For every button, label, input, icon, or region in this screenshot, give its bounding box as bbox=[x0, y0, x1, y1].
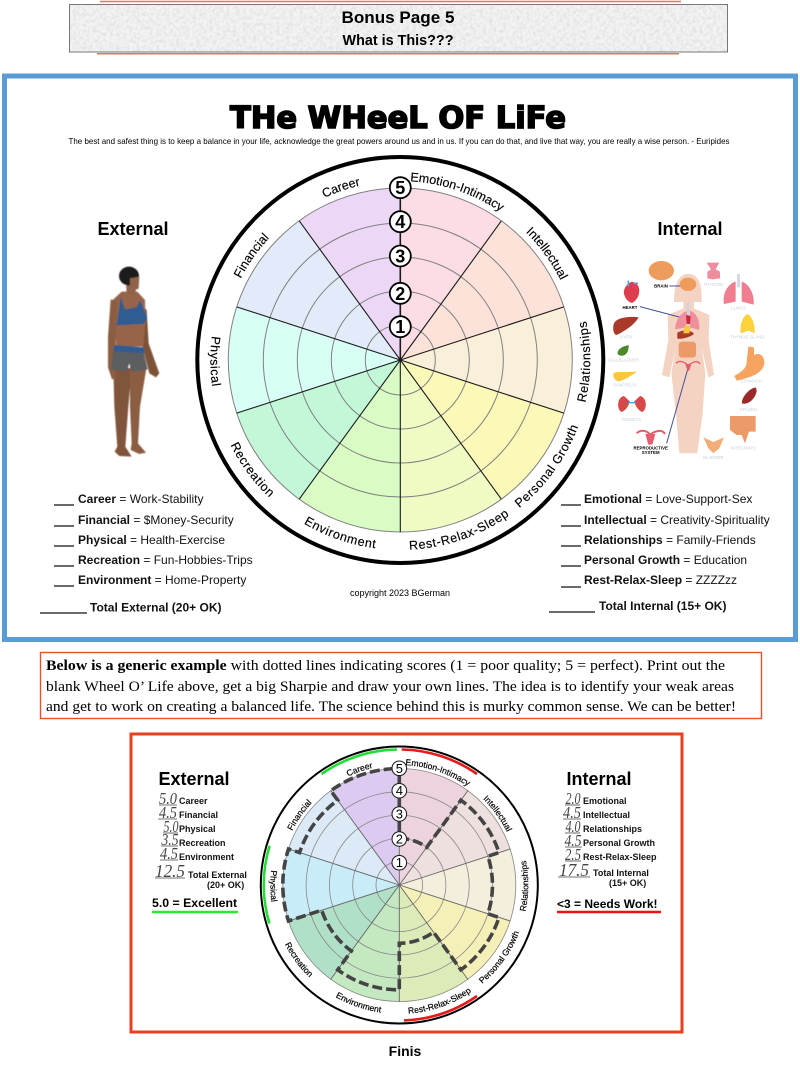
organ: gallbladder bbox=[618, 345, 629, 356]
internal scores: (15+ OK) bbox=[609, 878, 646, 888]
legend: needs work: <3 = Needs Work! bbox=[557, 897, 658, 911]
example score markers bbox=[392, 761, 407, 870]
example wheel labels: Rest-Relax-Sleep bbox=[408, 988, 471, 1014]
wheel labels: Environment bbox=[304, 516, 376, 548]
score outline bbox=[283, 768, 499, 990]
example wheel labels: Intellectual bbox=[483, 795, 512, 832]
internal scores: Total Internal bbox=[593, 868, 649, 878]
header subtitle: What is This??? bbox=[342, 33, 454, 49]
organ: bladder bbox=[703, 437, 724, 453]
external checklist: Physical = Health-Exercise bbox=[78, 533, 225, 547]
organ: brain bbox=[649, 261, 696, 291]
wheel chart bbox=[195, 155, 606, 565]
copyright: copyright 2023 BGerman bbox=[350, 588, 450, 598]
example wheel chart bbox=[260, 746, 539, 1024]
external scores: (20+ OK) bbox=[207, 880, 244, 890]
external checklist: Recreation = Fun-Hobbies-Trips bbox=[78, 553, 253, 567]
organ captions: PANCREAS bbox=[613, 383, 637, 388]
organ: thyroid bbox=[707, 263, 720, 279]
organ captions: THYMUS GLAND bbox=[730, 334, 765, 339]
internal checklist: Rest-Relax-Sleep = ZZZZzz bbox=[584, 573, 737, 587]
internal scores: 2.5 bbox=[565, 845, 581, 864]
closing word: Finis bbox=[389, 1043, 422, 1059]
heading: internal: Internal bbox=[657, 219, 723, 239]
wheel labels: Financial bbox=[234, 232, 269, 278]
near arm bbox=[108, 299, 117, 379]
waistband bbox=[113, 345, 144, 354]
example score markers: 1 bbox=[396, 855, 403, 870]
external scores: 5.0 bbox=[159, 789, 177, 808]
example wheel labels: Emotion-Intimacy bbox=[406, 759, 470, 786]
organ captions: LIVER bbox=[620, 335, 632, 340]
wheel labels: Intellectual bbox=[526, 226, 568, 280]
wheel labels: Physical bbox=[208, 336, 222, 386]
far arm bbox=[142, 305, 159, 377]
score markers: 1 bbox=[395, 317, 405, 337]
bra bbox=[117, 297, 147, 325]
wheel labels: Rest-Relax-Sleep bbox=[410, 511, 508, 550]
internal scores: Intellectual bbox=[583, 810, 630, 820]
heading: external: External bbox=[97, 219, 169, 239]
organ: spleen bbox=[742, 387, 757, 404]
callout: explanation text bbox=[40, 652, 762, 718]
external scores: Recreation bbox=[179, 838, 226, 848]
heading: external example: External bbox=[158, 769, 230, 789]
internal checklist: Total Internal (15+ OK) bbox=[599, 599, 726, 613]
external scores: Career bbox=[179, 796, 208, 806]
organ captions: LUNGS bbox=[731, 305, 746, 310]
external checklist: Total External (20+ OK) bbox=[90, 600, 221, 614]
internal scores: 4.5 bbox=[563, 803, 581, 822]
external scores bbox=[155, 789, 247, 890]
header banner bbox=[70, 2, 728, 54]
wheel labels: Personal Growth bbox=[514, 426, 578, 508]
organ: reproductive system bbox=[637, 369, 688, 445]
external scores: 3.5 bbox=[161, 830, 178, 849]
callout: explanation text: and get to work on creating a balanced life. The science behind this is murky common sense. We can be better! bbox=[46, 699, 736, 715]
internal checklist: Personal Growth = Education bbox=[584, 553, 747, 567]
internal scores: Personal Growth bbox=[583, 838, 655, 848]
callout: explanation text: Below is a generic example with dotted lines indicating scores (1 = poor quality; 5 = perfect). Print out the bbox=[46, 658, 725, 674]
organ: heart bbox=[624, 281, 687, 319]
near leg bbox=[113, 367, 132, 457]
internal scores: 17.5 bbox=[559, 860, 589, 880]
external scores: Total External bbox=[188, 870, 247, 880]
callout: explanation text: blank Wheel O’ Life above, get a big Sharpie and draw your own lines. The idea is to identify your weak areas bbox=[46, 679, 734, 695]
score markers: 2 bbox=[395, 284, 405, 304]
organ captions: GALLBLADDER bbox=[608, 358, 639, 363]
example wheel labels bbox=[268, 759, 530, 1014]
external checklist: Career = Work-Stability bbox=[78, 492, 204, 506]
organ captions: HEART bbox=[623, 305, 638, 310]
organ: thymus gland bbox=[740, 314, 755, 333]
highlight arcs bbox=[264, 750, 477, 1020]
example score markers: 3 bbox=[396, 806, 403, 822]
internal scores: 4.0 bbox=[566, 817, 581, 836]
internal organs in body bbox=[675, 303, 700, 371]
example wheel labels: Personal Growth bbox=[478, 931, 520, 984]
example wheel labels: Physical bbox=[268, 870, 278, 902]
organ captions: SYSTEM bbox=[642, 450, 660, 455]
internal scores bbox=[558, 789, 657, 888]
external scores: 4.5 bbox=[160, 844, 178, 863]
neck and face bbox=[126, 282, 137, 295]
wheel labels: Recreation bbox=[230, 442, 273, 498]
example wheel labels: Environment bbox=[336, 992, 382, 1013]
wheel labels: Emotion-Intimacy bbox=[411, 172, 504, 212]
example score markers: 2 bbox=[396, 832, 403, 846]
legend: excellent: 5.0 = Excellent bbox=[152, 896, 237, 910]
internal checklist: Relationships = Family-Friends bbox=[584, 533, 756, 547]
external checklist bbox=[40, 492, 253, 614]
internal checklist: Intellectual = Creativity-Spirituality bbox=[584, 513, 770, 527]
organ captions: KIDNEYS bbox=[622, 417, 641, 422]
internal checklist: Emotional = Love-Support-Sex bbox=[584, 492, 752, 506]
internal checklist bbox=[549, 492, 770, 613]
internal scores: 4.5 bbox=[564, 831, 582, 850]
organ: intestines bbox=[730, 416, 756, 443]
organ: pancreas bbox=[613, 371, 637, 381]
organ captions: SPLEEN bbox=[740, 407, 757, 412]
panel: example scored wheel bbox=[130, 732, 684, 1034]
external checklist: Financial = $Money-Security bbox=[78, 513, 234, 527]
organ: kidneys bbox=[618, 396, 646, 412]
header title: Bonus Page 5 bbox=[342, 8, 454, 27]
organ: stomach bbox=[734, 347, 764, 381]
example wheel labels: Relationships bbox=[520, 860, 530, 912]
organ captions: THYROID bbox=[704, 282, 723, 287]
organ captions: REPRODUCTIVE bbox=[633, 445, 668, 450]
organ captions bbox=[608, 282, 765, 460]
external checklist: Environment = Home-Property bbox=[78, 573, 246, 587]
example wheel labels: Career bbox=[346, 763, 372, 776]
quote: The best and safest thing is to keep a balance in your life, acknowledge the great powers around us and in us. If you can do that, and live that way, you are really a wise person. - Euripides bbox=[68, 136, 730, 146]
organ captions: INTESTINES bbox=[731, 445, 756, 450]
score markers: 5 bbox=[395, 178, 405, 198]
wheel labels bbox=[208, 172, 591, 550]
organ captions: BRAIN bbox=[654, 284, 668, 289]
external scores: Financial bbox=[179, 810, 218, 820]
organ captions: BLADDER bbox=[703, 455, 724, 460]
internal scores: Relationships bbox=[583, 824, 642, 834]
far leg bbox=[130, 367, 147, 454]
illustration: external body figure bbox=[108, 267, 159, 457]
internal scores: Emotional bbox=[583, 796, 627, 806]
panel: blank wheel of life bbox=[2, 74, 798, 642]
heading: internal example: Internal bbox=[566, 769, 632, 789]
torso bbox=[113, 292, 145, 347]
organ captions: STOMACH bbox=[740, 379, 762, 384]
external scores: Physical bbox=[179, 824, 216, 834]
score markers: 3 bbox=[395, 246, 405, 266]
score markers bbox=[390, 177, 411, 337]
external scores: Environment bbox=[179, 852, 234, 862]
internal scores: 2.0 bbox=[566, 789, 581, 808]
score markers: 4 bbox=[395, 212, 405, 232]
title: THe WHeeL OF LiFe bbox=[230, 101, 566, 136]
example score markers: 4 bbox=[396, 783, 403, 798]
shorts bbox=[111, 351, 148, 372]
external scores: 5.0 bbox=[164, 817, 179, 836]
illustration: internal organs figure bbox=[608, 261, 765, 460]
organ: lungs bbox=[724, 274, 754, 305]
example score markers: 5 bbox=[396, 761, 403, 776]
external scores: 12.5 bbox=[155, 861, 185, 881]
example wheel labels: Recreation bbox=[285, 942, 312, 978]
body silhouette bbox=[662, 274, 714, 453]
wheel labels: Career bbox=[322, 179, 359, 196]
external scores: 4.5 bbox=[159, 803, 177, 822]
wheel labels: Relationships bbox=[577, 322, 591, 402]
organ: liver bbox=[613, 317, 639, 335]
internal scores: Rest-Relax-Sleep bbox=[583, 852, 657, 862]
example wheel labels: Financial bbox=[287, 798, 312, 830]
